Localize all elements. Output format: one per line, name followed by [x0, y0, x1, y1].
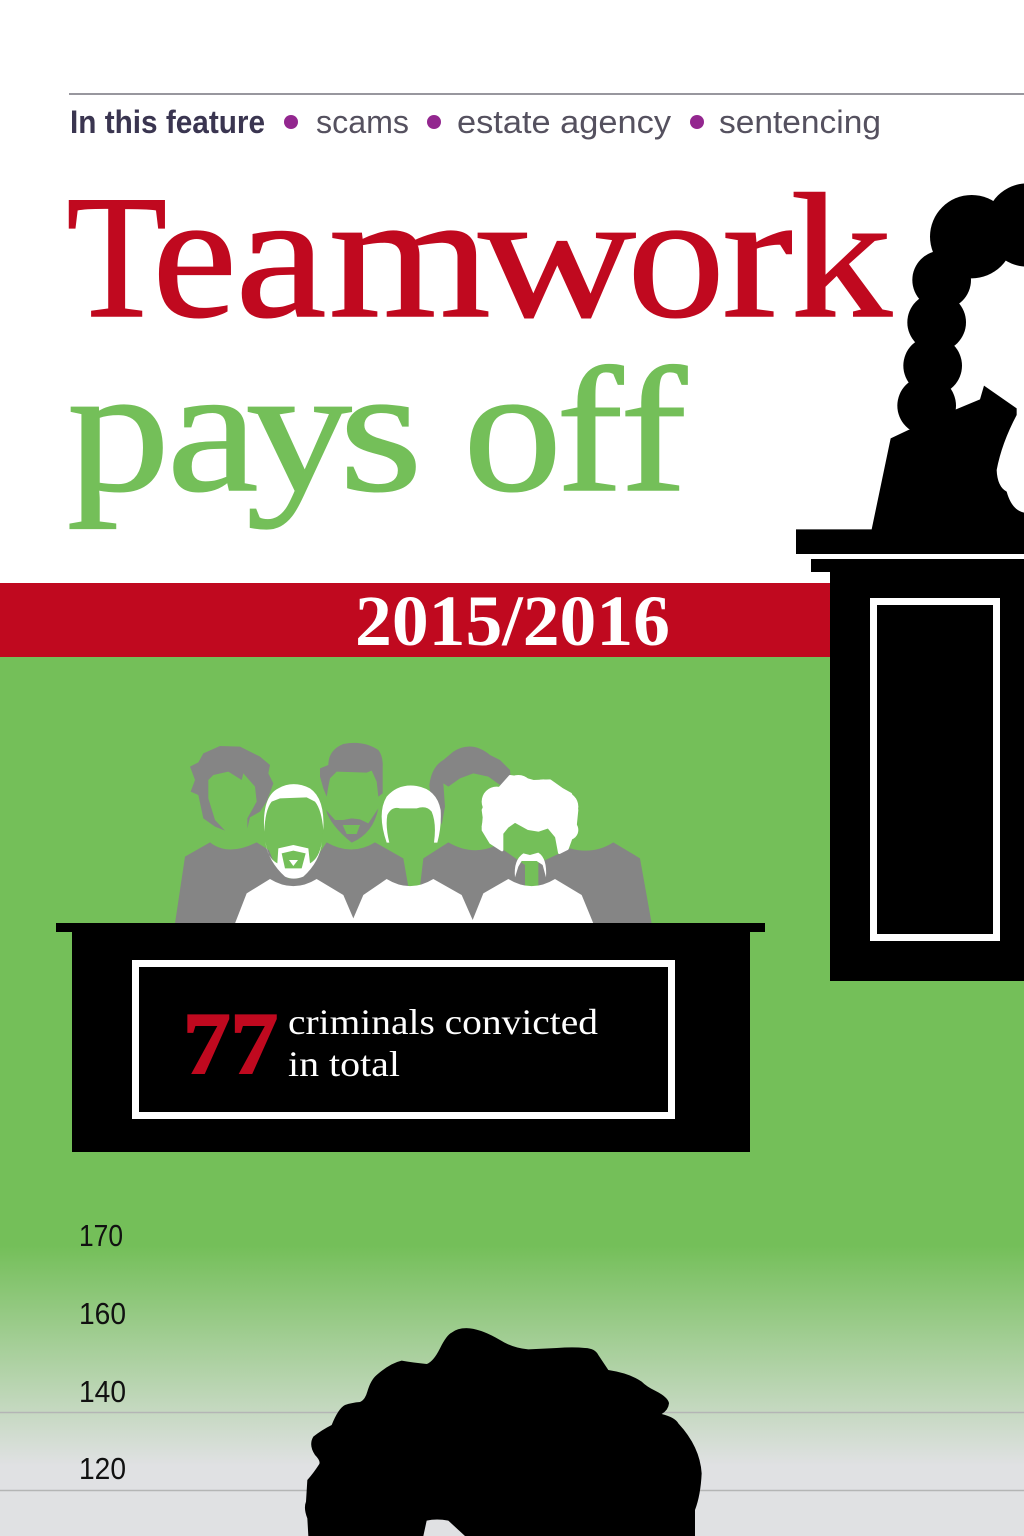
title: m [329, 156, 491, 355]
defendants group [175, 743, 652, 923]
bearded man [264, 784, 323, 832]
title [66, 156, 892, 529]
dock [56, 923, 765, 1152]
bearded man's face [265, 830, 323, 878]
feature strapline: In this feature [70, 104, 265, 140]
feature strapline [70, 104, 881, 140]
defendant head silhouette [305, 1328, 702, 1536]
title: y [246, 330, 352, 529]
feature strapline: scams [316, 104, 409, 140]
central figure hair [382, 786, 441, 843]
height scale labels: 140 [79, 1374, 126, 1409]
title: p [67, 330, 170, 529]
title: k [791, 157, 892, 355]
title: f [620, 331, 688, 529]
judge bench [811, 559, 1024, 981]
height scale labels: 120 [79, 1451, 126, 1486]
title: o [627, 156, 725, 355]
title: s [339, 330, 423, 529]
convicted label: in total [288, 1044, 400, 1084]
year banner [0, 581, 830, 661]
year banner: 2015/2016 [355, 581, 670, 661]
title: e [152, 156, 237, 355]
bench panel [874, 602, 996, 938]
title: w [478, 156, 636, 355]
title: a [235, 156, 326, 355]
title: f [556, 331, 624, 529]
judge figure [796, 183, 1024, 554]
height scale labels: 170 [79, 1218, 123, 1253]
convicted label [288, 1002, 598, 1084]
title: T [66, 160, 167, 355]
title: r [722, 156, 793, 355]
convicted count: 77 [183, 996, 278, 1093]
judge silhouette and bench [796, 183, 1024, 981]
feature strapline: estate agency [457, 104, 671, 140]
dock inner frame [136, 964, 672, 1116]
white defendants [235, 775, 593, 923]
title: o [463, 330, 562, 529]
height scale labels: 160 [79, 1296, 126, 1331]
title: a [167, 330, 258, 529]
grey defendants [175, 743, 652, 923]
height scale labels [79, 1218, 126, 1486]
feature strapline: sentencing [719, 104, 881, 140]
curly hair figure [482, 775, 578, 853]
convicted label: criminals convicted [288, 1002, 598, 1042]
green background panel [0, 657, 1024, 1536]
